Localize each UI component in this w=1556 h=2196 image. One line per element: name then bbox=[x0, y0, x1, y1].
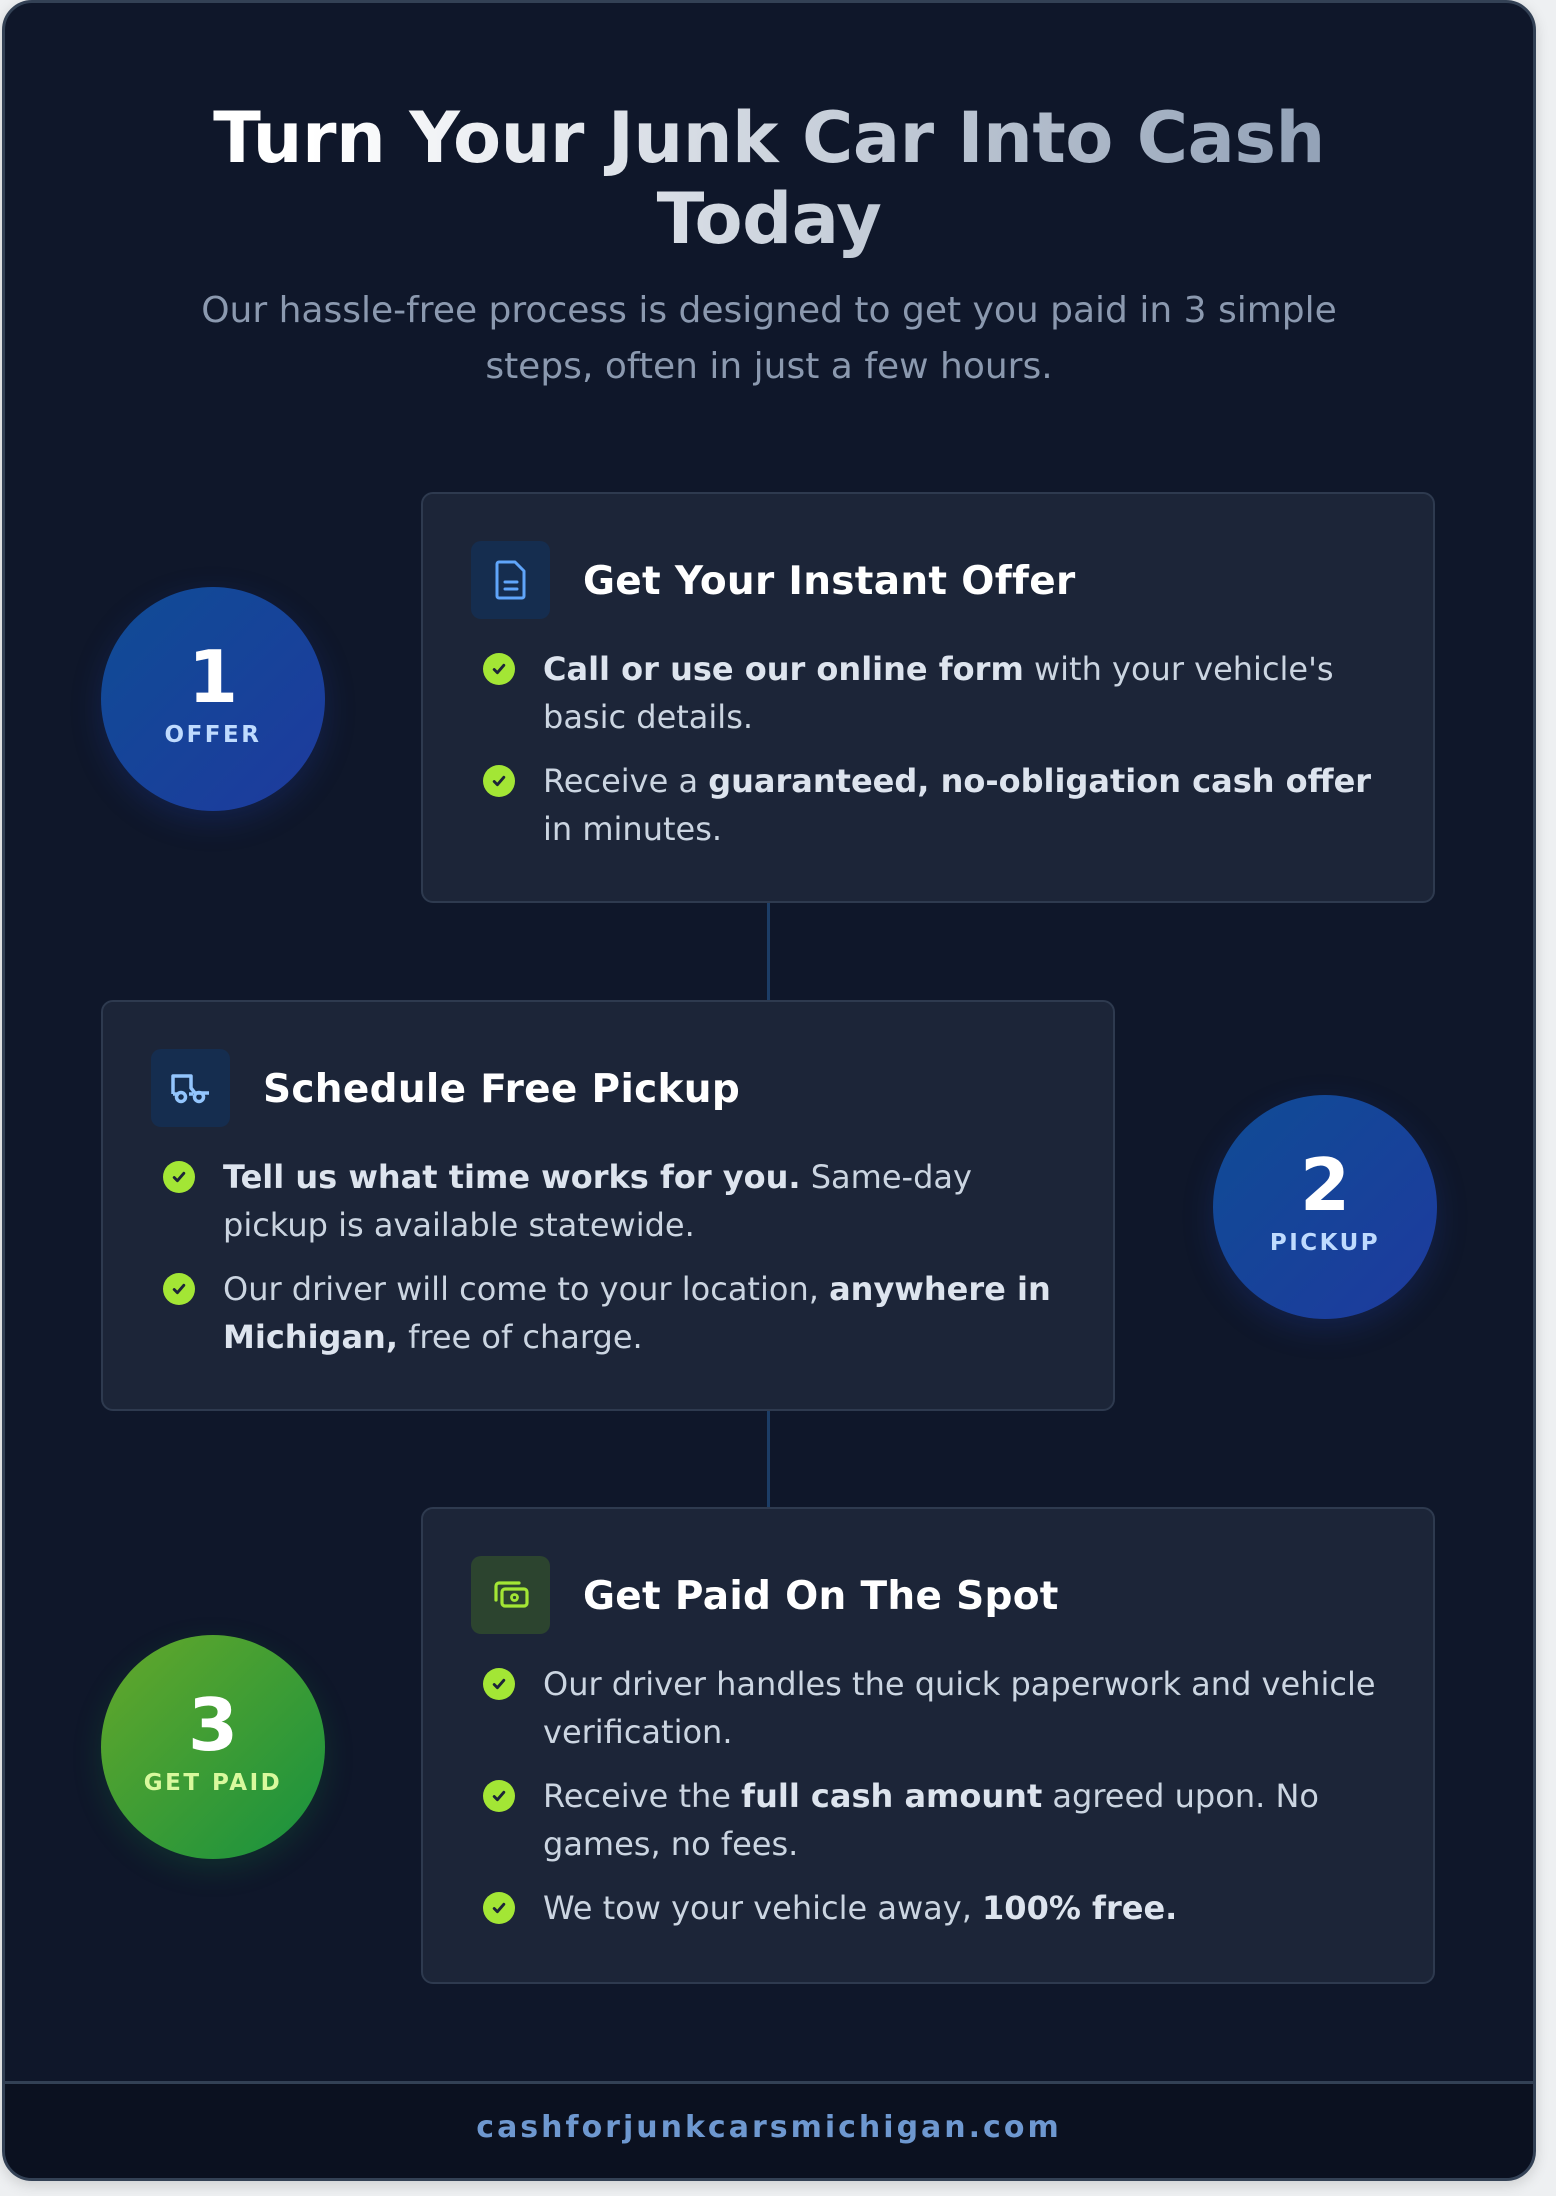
connector line 2 bbox=[767, 1407, 770, 1507]
title bbox=[5, 98, 1533, 260]
bullet list bbox=[483, 1665, 1376, 1927]
bullet list: Our driver will come to your location, anywhere in bbox=[223, 1270, 1051, 1308]
step badge 3: GET PAID bbox=[144, 1770, 282, 1796]
bullet list bbox=[163, 1158, 1051, 1356]
step badge 1 bbox=[101, 587, 325, 811]
heading: Schedule Free Pickup bbox=[263, 1067, 740, 1112]
bullet list: basic details. bbox=[543, 698, 753, 736]
connector line 1 bbox=[767, 899, 770, 1000]
title: Today bbox=[657, 178, 881, 260]
bullet list: verification. bbox=[543, 1713, 732, 1751]
panel: step 2 pickup bbox=[101, 1000, 1115, 1411]
bullet list: Michigan, free of charge. bbox=[223, 1318, 643, 1356]
icon: document bbox=[471, 541, 550, 619]
step badge 3: 3 bbox=[188, 1683, 238, 1767]
bullet list: in minutes. bbox=[543, 810, 722, 848]
subtitle bbox=[201, 290, 1337, 387]
footer: cashforjunkcarsmichigan.com bbox=[476, 2110, 1062, 2145]
heading: Get Paid On The Spot bbox=[583, 1574, 1059, 1619]
step badge 1: 1 bbox=[188, 635, 238, 719]
step badge 2: PICKUP bbox=[1270, 1230, 1380, 1256]
bullet list: Receive a guaranteed, no-obligation cash offer bbox=[543, 762, 1371, 800]
icon: truck bbox=[151, 1049, 230, 1127]
step badge 2: 2 bbox=[1300, 1143, 1350, 1227]
bullet list: We tow your vehicle away, 100% free. bbox=[543, 1889, 1177, 1927]
bullet list: Our driver handles the quick paperwork and vehicle bbox=[543, 1665, 1376, 1703]
panel: step 3 get paid bbox=[421, 1507, 1435, 1984]
footer bbox=[5, 2081, 1533, 2191]
step badge 3 bbox=[101, 1635, 325, 1859]
step badge 1: OFFER bbox=[165, 722, 261, 748]
icon: cash bbox=[471, 1556, 550, 1634]
bullet list bbox=[483, 650, 1371, 848]
bullet list: Call or use our online form with your vehicle's bbox=[543, 650, 1334, 688]
bullet list: Receive the full cash amount agreed upon. No bbox=[543, 1777, 1319, 1815]
bullet list: pickup is available statewide. bbox=[223, 1206, 695, 1244]
step badge 2 bbox=[1213, 1095, 1437, 1319]
subtitle: steps, often in just a few hours. bbox=[485, 346, 1053, 387]
subtitle: Our hassle-free process is designed to get you paid in 3 simple bbox=[201, 290, 1337, 331]
panel: step 1 offer bbox=[421, 492, 1435, 903]
bullet list: games, no fees. bbox=[543, 1825, 798, 1863]
title: Turn Your Junk Car Into Cash bbox=[213, 97, 1325, 179]
bullet list: Tell us what time works for you. Same-day bbox=[223, 1158, 972, 1196]
heading: Get Your Instant Offer bbox=[583, 559, 1076, 604]
